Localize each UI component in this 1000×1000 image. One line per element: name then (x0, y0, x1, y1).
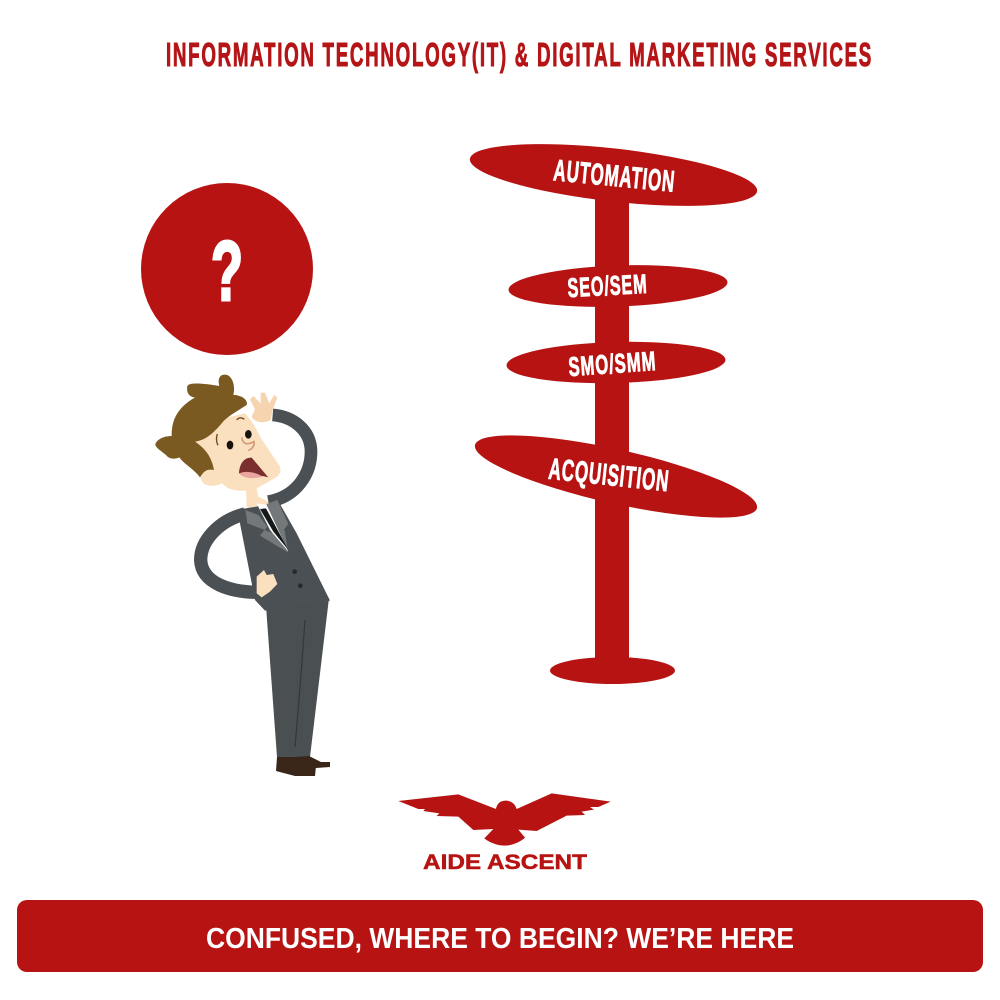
illustration: confused businessman (155, 375, 330, 776)
icon: question mark circle (141, 183, 313, 355)
icon: question mark circle: ? (211, 224, 243, 318)
sign: seo/sem (508, 262, 728, 310)
sign: seo/sem: SEO/SEM (567, 269, 648, 303)
banner: CONFUSED, WHERE TO BEGIN? WE’RE HERE (206, 923, 794, 955)
man: hand on hip (257, 570, 277, 597)
sign: smo/smm: SMO/SMM (567, 346, 657, 382)
man: jacket (240, 499, 330, 611)
sign: automation: AUTOMATION (552, 154, 677, 199)
sign: smo/smm (506, 339, 726, 386)
man: shoes (276, 756, 330, 776)
man: face (195, 413, 281, 491)
man: trousers (266, 598, 329, 757)
man: raised hand (250, 393, 277, 422)
signpost pole (595, 190, 629, 672)
man: raised arm (268, 415, 311, 502)
logo: aide ascent (398, 793, 611, 874)
man: open mouth (239, 458, 268, 478)
signpost base (550, 657, 675, 684)
logo wordmark: AIDE ASCENT (423, 851, 587, 874)
man: arm on hip (201, 514, 260, 592)
man: hair (155, 375, 247, 477)
man: neck and shirt (246, 488, 268, 528)
signpost (467, 133, 763, 684)
man: eyes and brows (216, 418, 254, 451)
banner (17, 900, 983, 972)
sign: acquisition: ACQUISITION (547, 453, 671, 498)
sign: acquisition (469, 419, 763, 534)
icon: eagle (398, 793, 611, 846)
sign: automation (467, 133, 760, 217)
